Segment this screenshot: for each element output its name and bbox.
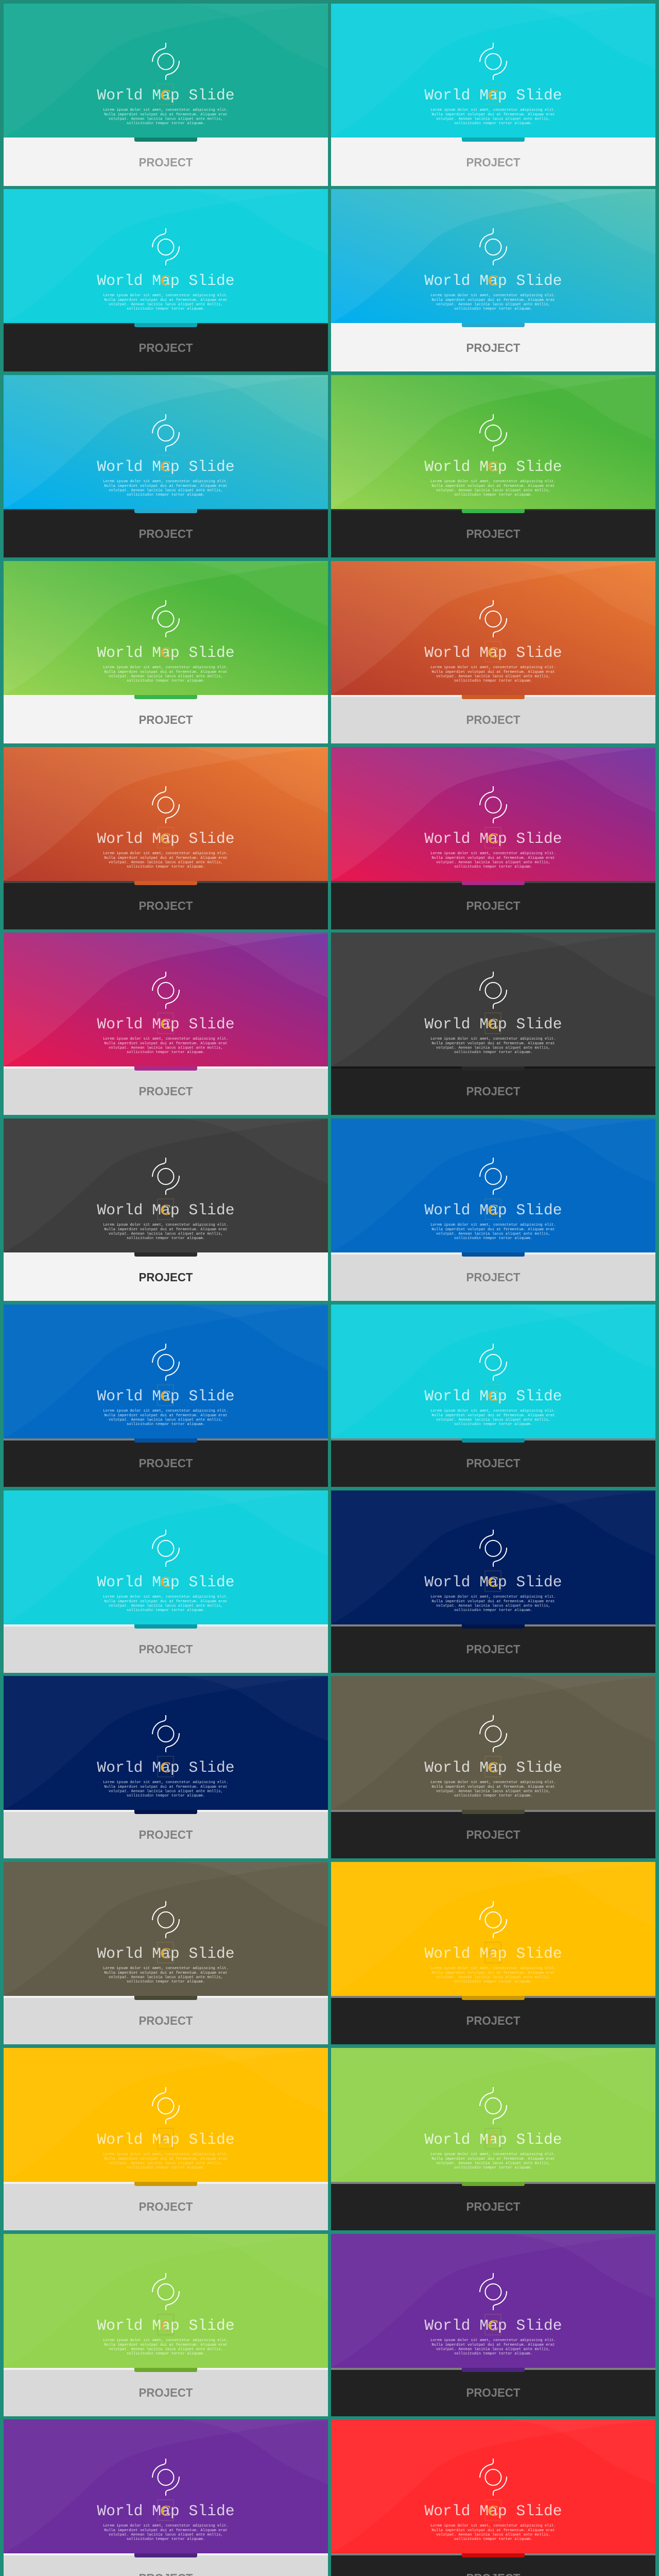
panel: green gradient slide, dark footer: sollicitudin tempor tortor aliquam. <box>454 493 532 497</box>
panel: orange gradient slide, grey footer: PROJECT <box>466 713 520 726</box>
panel: cyan slide, dark footer (second) <box>331 1304 655 1487</box>
panel: charcoal slide, light footer: PROJECT <box>139 1270 193 1284</box>
panel: yellow slide, grey footer: PROJECT <box>139 2200 193 2213</box>
panel: navy slide, dark footer: Nulla imperdiet volutpat dui at fermentum. Aliquam erat <box>431 1600 555 1604</box>
panel: navy slide, grey footer: Lorem ipsum dolor sit amet, consectetur adipiscing elit. <box>103 1781 229 1785</box>
panel: navy slide, grey footer: PROJECT <box>139 1828 193 1841</box>
panel: red slide, dark footer: sollicitudin tempor tortor aliquam. <box>454 2537 532 2541</box>
panel: lime slide, grey footer <box>4 2234 328 2416</box>
panel: cyan slide, dark footer (second): Lorem ipsum dolor sit amet, consectetur adipiscing elit. <box>430 1409 556 1413</box>
panel: cyan slide, grey footer: Nulla imperdiet volutpat dui at fermentum. Aliquam erat <box>104 1600 228 1604</box>
panel: lime slide, grey footer: Lorem ipsum dolor sit amet, consectetur adipiscing elit. <box>103 2338 229 2343</box>
panel: purple slide, dark footer <box>331 2234 655 2416</box>
panel: green gradient slide, light footer <box>4 561 328 743</box>
panel: blue slide, dark footer: Nulla imperdiet volutpat dui at fermentum. Aliquam erat <box>104 1414 228 1418</box>
panel: teal slide, light footer: Nulla imperdiet volutpat dui at fermentum. Aliquam erat <box>104 113 228 117</box>
panel: magenta gradient slide, dark footer <box>331 747 655 929</box>
panel: blue slide, dark footer: World Map Slide <box>97 1387 235 1405</box>
panel: teal slide, light footer: volutpat. Aenean lacinia lacus aliquet ante mollis, <box>109 117 223 122</box>
panel: magenta gradient slide, dark footer: C <box>488 830 499 847</box>
panel: blue slide, grey footer: sollicitudin tempor tortor aliquam. <box>454 1236 532 1241</box>
panel: blue-green gradient slide, light footer: PROJECT <box>466 341 520 354</box>
panel: magenta gradient slide, grey footer: PROJECT <box>139 1084 193 1098</box>
panel: cyan slide, dark footer <box>4 189 328 371</box>
panel: cyan slide, grey footer: C <box>160 1573 171 1590</box>
panel: purple slide, grey footer <box>4 2419 328 2576</box>
panel: orange gradient slide, dark footer: sollicitudin tempor tortor aliquam. <box>127 865 205 869</box>
panel: charcoal slide, light footer: Lorem ipsum dolor sit amet, consectetur adipiscing elit. <box>103 1223 229 1227</box>
panel: yellow slide, dark footer: sollicitudin tempor tortor aliquam. <box>454 1980 532 1984</box>
panel: cyan slide, grey footer: World Map Slide <box>97 1573 235 1591</box>
panel: yellow slide, grey footer: volutpat. Aenean lacinia lacus aliquet ante mollis, <box>109 2162 223 2166</box>
panel: blue-green gradient slide, dark footer: World Map Slide <box>97 458 235 476</box>
panel: charcoal slide, dark footer: World Map Slide <box>424 1015 562 1033</box>
panel: red slide, dark footer: World Map Slide <box>424 2502 562 2520</box>
panel: yellow slide, grey footer: sollicitudin tempor tortor aliquam. <box>127 2166 205 2170</box>
panel: blue slide, dark footer: Lorem ipsum dolor sit amet, consectetur adipiscing elit. <box>103 1409 229 1413</box>
panel: blue-green gradient slide, dark footer: PROJECT <box>139 527 193 540</box>
panel: cyan slide, light footer: Nulla imperdiet volutpat dui at fermentum. Aliquam erat <box>431 113 555 117</box>
panel: charcoal slide, light footer: Nulla imperdiet volutpat dui at fermentum. Aliquam erat <box>104 1228 228 1232</box>
panel: orange gradient slide, grey footer <box>331 561 655 743</box>
panel: blue-green gradient slide, light footer: volutpat. Aenean lacinia lacus aliquet ante mollis, <box>436 303 550 307</box>
panel: magenta gradient slide, grey footer: volutpat. Aenean lacinia lacus aliquet ante mollis, <box>109 1046 223 1050</box>
panel: purple slide, dark footer: World Map Slide <box>424 2317 562 2334</box>
panel: navy slide, grey footer: sollicitudin tempor tortor aliquam. <box>127 1794 205 1798</box>
panel: magenta gradient slide, grey footer <box>4 933 328 1115</box>
panel: purple slide, dark footer: PROJECT <box>466 2386 520 2399</box>
panel: navy slide, dark footer: World Map Slide <box>424 1573 562 1591</box>
panel: teal slide, light footer <box>4 4 328 186</box>
panel: cyan slide, dark footer (second): World Map Slide <box>424 1387 562 1405</box>
panel: orange gradient slide, grey footer: volutpat. Aenean lacinia lacus aliquet ante mollis, <box>436 675 550 679</box>
panel: blue slide, grey footer <box>331 1118 655 1301</box>
panel: yellow slide, dark footer: volutpat. Aenean lacinia lacus aliquet ante mollis, <box>436 1975 550 1979</box>
panel: cyan slide, dark footer: PROJECT <box>139 341 193 354</box>
panel: red slide, dark footer: volutpat. Aenean lacinia lacus aliquet ante mollis, <box>436 2533 550 2537</box>
panel: charcoal slide, light footer: World Map Slide <box>97 1201 235 1219</box>
panel: magenta gradient slide, dark footer: World Map Slide <box>424 830 562 848</box>
panel: green gradient slide, dark footer: World Map Slide <box>424 458 562 476</box>
panel: cyan slide, light footer: C <box>488 87 499 104</box>
panel: blue-green gradient slide, light footer: sollicitudin tempor tortor aliquam. <box>454 307 532 311</box>
panel: yellow slide, dark footer <box>331 1862 655 2044</box>
panel: blue slide, dark footer: sollicitudin tempor tortor aliquam. <box>127 1422 205 1427</box>
panel: green gradient slide, light footer: Lorem ipsum dolor sit amet, consectetur adipiscing elit. <box>103 666 229 670</box>
panel: cyan slide, dark footer (second): volutpat. Aenean lacinia lacus aliquet ante mollis, <box>436 1418 550 1422</box>
panel: cyan slide, light footer: volutpat. Aenean lacinia lacus aliquet ante mollis, <box>436 117 550 122</box>
panel: magenta gradient slide, dark footer: volutpat. Aenean lacinia lacus aliquet ante mollis, <box>436 860 550 865</box>
panel: lime slide, dark footer <box>331 2048 655 2230</box>
panel: navy slide, dark footer: Lorem ipsum dolor sit amet, consectetur adipiscing elit. <box>430 1595 556 1599</box>
panel: magenta gradient slide, grey footer: Lorem ipsum dolor sit amet, consectetur adipiscing elit. <box>103 1037 229 1041</box>
panel: green gradient slide, dark footer: C <box>488 458 499 475</box>
panel: green gradient slide, dark footer: volutpat. Aenean lacinia lacus aliquet ante mollis, <box>436 488 550 493</box>
panel: olive slide, dark footer: World Map Slide <box>424 1759 562 1776</box>
panel: olive slide, grey footer: Nulla imperdiet volutpat dui at fermentum. Aliquam erat <box>104 1971 228 1975</box>
panel: yellow slide, grey footer <box>4 2048 328 2230</box>
panel: cyan slide, dark footer: World Map Slide <box>97 272 235 290</box>
panel: magenta gradient slide, grey footer: Nulla imperdiet volutpat dui at fermentum. Aliquam erat <box>104 1042 228 1046</box>
panel: green gradient slide, dark footer <box>331 375 655 557</box>
panel: lime slide, dark footer: World Map Slide <box>424 2131 562 2148</box>
panel: magenta gradient slide, grey footer: C <box>160 1015 171 1032</box>
panel: blue slide, dark footer <box>4 1304 328 1487</box>
panel: lime slide, grey footer: sollicitudin tempor tortor aliquam. <box>127 2352 205 2356</box>
panel: blue-green gradient slide, dark footer: Nulla imperdiet volutpat dui at fermentum. Aliquam erat <box>104 484 228 488</box>
panel: blue-green gradient slide, dark footer: C <box>160 458 171 475</box>
panel: olive slide, dark footer: volutpat. Aenean lacinia lacus aliquet ante mollis, <box>436 1790 550 1794</box>
panel: purple slide, grey footer: World Map Slide <box>97 2502 235 2520</box>
panel: olive slide, dark footer: Lorem ipsum dolor sit amet, consectetur adipiscing elit. <box>430 1781 556 1785</box>
panel: cyan slide, dark footer (second): sollicitudin tempor tortor aliquam. <box>454 1422 532 1427</box>
panel: blue slide, grey footer: World Map Slide <box>424 1201 562 1219</box>
panel: orange gradient slide, grey footer: World Map Slide <box>424 644 562 662</box>
panel: charcoal slide, dark footer: Lorem ipsum dolor sit amet, consectetur adipiscing elit. <box>430 1037 556 1041</box>
panel: purple slide, dark footer: volutpat. Aenean lacinia lacus aliquet ante mollis, <box>436 2347 550 2351</box>
panel: green gradient slide, dark footer: Nulla imperdiet volutpat dui at fermentum. Aliquam erat <box>431 484 555 488</box>
panel: charcoal slide, light footer: sollicitudin tempor tortor aliquam. <box>127 1236 205 1241</box>
panel: olive slide, grey footer: Lorem ipsum dolor sit amet, consectetur adipiscing elit. <box>103 1967 229 1971</box>
panel: cyan slide, light footer: Lorem ipsum dolor sit amet, consectetur adipiscing elit. <box>430 108 556 112</box>
panel: purple slide, dark footer: Nulla imperdiet volutpat dui at fermentum. Aliquam erat <box>431 2343 555 2347</box>
panel: purple slide, dark footer: Lorem ipsum dolor sit amet, consectetur adipiscing elit. <box>430 2338 556 2343</box>
panel: purple slide, grey footer: Lorem ipsum dolor sit amet, consectetur adipiscing elit. <box>103 2524 229 2528</box>
panel: yellow slide, dark footer: PROJECT <box>466 2014 520 2027</box>
panel: olive slide, grey footer: sollicitudin tempor tortor aliquam. <box>127 1980 205 1984</box>
panel: yellow slide, dark footer: C <box>488 1945 499 1962</box>
panel: cyan slide, dark footer (second): PROJECT <box>466 1456 520 1470</box>
panel: green gradient slide, light footer: PROJECT <box>139 713 193 726</box>
panel: blue slide, dark footer: PROJECT <box>139 1456 193 1470</box>
panel: purple slide, grey footer: volutpat. Aenean lacinia lacus aliquet ante mollis, <box>109 2533 223 2537</box>
panel: orange gradient slide, dark footer: C <box>160 830 171 847</box>
panel: cyan slide, dark footer: C <box>160 272 171 289</box>
panel: lime slide, dark footer: C <box>488 2131 499 2148</box>
panel: cyan slide, dark footer: sollicitudin tempor tortor aliquam. <box>127 307 205 311</box>
panel: orange gradient slide, dark footer: Lorem ipsum dolor sit amet, consectetur adipiscing elit. <box>103 852 229 856</box>
panel: yellow slide, grey footer: Lorem ipsum dolor sit amet, consectetur adipiscing elit. <box>103 2153 229 2157</box>
panel: cyan slide, grey footer: volutpat. Aenean lacinia lacus aliquet ante mollis, <box>109 1604 223 1608</box>
panel: teal slide, light footer: sollicitudin tempor tortor aliquam. <box>127 122 205 126</box>
panel: blue slide, grey footer: C <box>488 1201 499 1218</box>
panel: green gradient slide, light footer: C <box>160 644 171 661</box>
panel: cyan slide, light footer: World Map Slide <box>424 87 562 104</box>
panel: magenta gradient slide, grey footer: sollicitudin tempor tortor aliquam. <box>127 1050 205 1055</box>
panel: lime slide, grey footer: Nulla imperdiet volutpat dui at fermentum. Aliquam erat <box>104 2343 228 2347</box>
panel: blue slide, dark footer: C <box>160 1387 171 1404</box>
panel: cyan slide, grey footer: sollicitudin tempor tortor aliquam. <box>127 1608 205 1613</box>
panel: charcoal slide, dark footer <box>331 933 655 1115</box>
panel: blue slide, grey footer: volutpat. Aenean lacinia lacus aliquet ante mollis, <box>436 1232 550 1236</box>
panel: cyan slide, grey footer: Lorem ipsum dolor sit amet, consectetur adipiscing elit. <box>103 1595 229 1599</box>
panel: olive slide, grey footer: volutpat. Aenean lacinia lacus aliquet ante mollis, <box>109 1975 223 1979</box>
panel: orange gradient slide, dark footer: volutpat. Aenean lacinia lacus aliquet ante mollis, <box>109 860 223 865</box>
panel: navy slide, dark footer <box>331 1490 655 1673</box>
panel: teal slide, light footer: PROJECT <box>139 156 193 169</box>
panel: orange gradient slide, dark footer: PROJECT <box>139 899 193 912</box>
panel: olive slide, dark footer: Nulla imperdiet volutpat dui at fermentum. Aliquam erat <box>431 1785 555 1789</box>
panel: purple slide, grey footer: Nulla imperdiet volutpat dui at fermentum. Aliquam erat <box>104 2529 228 2533</box>
panel: charcoal slide, light footer <box>4 1118 328 1301</box>
panel: purple slide, grey footer: C <box>160 2502 171 2519</box>
panel: navy slide, grey footer: World Map Slide <box>97 1759 235 1776</box>
panel: blue-green gradient slide, light footer <box>331 189 655 371</box>
panel: blue-green gradient slide, dark footer: volutpat. Aenean lacinia lacus aliquet ante mollis, <box>109 488 223 493</box>
panel: charcoal slide, dark footer: volutpat. Aenean lacinia lacus aliquet ante mollis, <box>436 1046 550 1050</box>
panel: purple slide, dark footer: sollicitudin tempor tortor aliquam. <box>454 2352 532 2356</box>
panel: cyan slide, dark footer: Lorem ipsum dolor sit amet, consectetur adipiscing elit. <box>103 294 229 298</box>
panel: navy slide, grey footer <box>4 1676 328 1858</box>
panel: green gradient slide, light footer: World Map Slide <box>97 644 235 662</box>
panel: navy slide, dark footer: volutpat. Aenean lacinia lacus aliquet ante mollis, <box>436 1604 550 1608</box>
panel: orange gradient slide, dark footer: Nulla imperdiet volutpat dui at fermentum. Aliquam erat <box>104 856 228 860</box>
panel: green gradient slide, light footer: Nulla imperdiet volutpat dui at fermentum. Aliquam erat <box>104 670 228 674</box>
panel: blue slide, dark footer: volutpat. Aenean lacinia lacus aliquet ante mollis, <box>109 1418 223 1422</box>
panel: red slide, dark footer: Lorem ipsum dolor sit amet, consectetur adipiscing elit. <box>430 2524 556 2528</box>
panel: orange gradient slide, dark footer: World Map Slide <box>97 830 235 848</box>
panel: red slide, dark footer: Nulla imperdiet volutpat dui at fermentum. Aliquam erat <box>431 2529 555 2533</box>
panel: yellow slide, grey footer: World Map Slide <box>97 2131 235 2148</box>
panel: lime slide, grey footer: PROJECT <box>139 2386 193 2399</box>
panel: lime slide, grey footer: C <box>160 2317 171 2334</box>
panel: orange gradient slide, grey footer: sollicitudin tempor tortor aliquam. <box>454 679 532 683</box>
panel: olive slide, dark footer: C <box>488 1759 499 1776</box>
panel: magenta gradient slide, dark footer: Lorem ipsum dolor sit amet, consectetur adipiscing elit. <box>430 852 556 856</box>
panel: cyan slide, light footer: sollicitudin tempor tortor aliquam. <box>454 122 532 126</box>
panel: lime slide, dark footer: PROJECT <box>466 2200 520 2213</box>
panel: cyan slide, dark footer: volutpat. Aenean lacinia lacus aliquet ante mollis, <box>109 303 223 307</box>
panel: blue-green gradient slide, light footer: World Map Slide <box>424 272 562 290</box>
panel: yellow slide, grey footer: C <box>160 2131 171 2148</box>
panel: olive slide, grey footer: World Map Slide <box>97 1945 235 1962</box>
panel: blue slide, grey footer: Nulla imperdiet volutpat dui at fermentum. Aliquam erat <box>431 1228 555 1232</box>
panel: lime slide, dark footer: sollicitudin tempor tortor aliquam. <box>454 2166 532 2170</box>
panel: green gradient slide, light footer: volutpat. Aenean lacinia lacus aliquet ante mollis, <box>109 675 223 679</box>
panel: charcoal slide, light footer: volutpat. Aenean lacinia lacus aliquet ante mollis, <box>109 1232 223 1236</box>
panel: charcoal slide, dark footer: PROJECT <box>466 1084 520 1098</box>
panel: olive slide, grey footer: C <box>160 1945 171 1962</box>
panel: purple slide, grey footer: sollicitudin tempor tortor aliquam. <box>127 2537 205 2541</box>
panel: teal slide, light footer: Lorem ipsum dolor sit amet, consectetur adipiscing elit. <box>103 108 229 112</box>
panel: navy slide, dark footer: PROJECT <box>466 1642 520 1656</box>
panel: cyan slide, light footer: PROJECT <box>466 156 520 169</box>
panel: teal slide, light footer: World Map Slide <box>97 87 235 104</box>
panel: blue slide, grey footer: Lorem ipsum dolor sit amet, consectetur adipiscing elit. <box>430 1223 556 1227</box>
panel: cyan slide, grey footer <box>4 1490 328 1673</box>
panel: red slide, dark footer: C <box>488 2502 499 2519</box>
panel: green gradient slide, light footer: sollicitudin tempor tortor aliquam. <box>127 679 205 683</box>
panel: blue-green gradient slide, light footer: Nulla imperdiet volutpat dui at fermentum. Aliquam erat <box>431 298 555 302</box>
panel: olive slide, grey footer <box>4 1862 328 2044</box>
panel: cyan slide, dark footer (second): C <box>488 1387 499 1404</box>
panel: navy slide, grey footer: volutpat. Aenean lacinia lacus aliquet ante mollis, <box>109 1790 223 1794</box>
panel: lime slide, grey footer: volutpat. Aenean lacinia lacus aliquet ante mollis, <box>109 2347 223 2351</box>
panel: blue-green gradient slide, dark footer: Lorem ipsum dolor sit amet, consectetur adipiscing elit. <box>103 480 229 484</box>
panel: magenta gradient slide, dark footer: Nulla imperdiet volutpat dui at fermentum. Aliquam erat <box>431 856 555 860</box>
panel: cyan slide, dark footer (second): Nulla imperdiet volutpat dui at fermentum. Aliquam erat <box>431 1414 555 1418</box>
panel: blue-green gradient slide, dark footer: sollicitudin tempor tortor aliquam. <box>127 493 205 497</box>
panel: teal slide, light footer: C <box>160 87 171 104</box>
panel: red slide, dark footer <box>331 2419 655 2576</box>
panel: orange gradient slide, grey footer: Lorem ipsum dolor sit amet, consectetur adipiscing elit. <box>430 666 556 670</box>
panel: magenta gradient slide, grey footer: World Map Slide <box>97 1015 235 1033</box>
panel: green gradient slide, dark footer: PROJECT <box>466 527 520 540</box>
panel: purple slide, dark footer: C <box>488 2317 499 2334</box>
panel: magenta gradient slide, dark footer: PROJECT <box>466 899 520 912</box>
panel: cyan slide, light footer <box>331 4 655 186</box>
panel: orange gradient slide, grey footer: C <box>488 644 499 661</box>
panel: charcoal slide, light footer: C <box>160 1201 171 1218</box>
panel: magenta gradient slide, dark footer: sollicitudin tempor tortor aliquam. <box>454 865 532 869</box>
panel: olive slide, grey footer: PROJECT <box>139 2014 193 2027</box>
panel: yellow slide, dark footer: World Map Slide <box>424 1945 562 1962</box>
panel: olive slide, dark footer: sollicitudin tempor tortor aliquam. <box>454 1794 532 1798</box>
panel: charcoal slide, dark footer: Nulla imperdiet volutpat dui at fermentum. Aliquam erat <box>431 1042 555 1046</box>
panel: navy slide, grey footer: C <box>160 1759 171 1776</box>
panel: navy slide, grey footer: Nulla imperdiet volutpat dui at fermentum. Aliquam erat <box>104 1785 228 1789</box>
panel: lime slide, dark footer: Lorem ipsum dolor sit amet, consectetur adipiscing elit. <box>430 2153 556 2157</box>
panel: navy slide, dark footer: sollicitudin tempor tortor aliquam. <box>454 1608 532 1613</box>
panel: charcoal slide, dark footer: sollicitudin tempor tortor aliquam. <box>454 1050 532 1055</box>
panel: orange gradient slide, dark footer <box>4 747 328 929</box>
panel: green gradient slide, dark footer: Lorem ipsum dolor sit amet, consectetur adipiscing elit. <box>430 480 556 484</box>
panel: lime slide, dark footer: volutpat. Aenean lacinia lacus aliquet ante mollis, <box>436 2162 550 2166</box>
panel: yellow slide, dark footer: Lorem ipsum dolor sit amet, consectetur adipiscing elit. <box>430 1967 556 1971</box>
panel: blue-green gradient slide, light footer: C <box>488 272 499 289</box>
panel: olive slide, dark footer: PROJECT <box>466 1828 520 1841</box>
panel: blue slide, grey footer: PROJECT <box>466 1270 520 1284</box>
panel: orange gradient slide, grey footer: Nulla imperdiet volutpat dui at fermentum. Aliquam erat <box>431 670 555 674</box>
panel: blue-green gradient slide, light footer: Lorem ipsum dolor sit amet, consectetur adipiscing elit. <box>430 294 556 298</box>
panel: blue-green gradient slide, dark footer <box>4 375 328 557</box>
panel: yellow slide, grey footer: Nulla imperdiet volutpat dui at fermentum. Aliquam erat <box>104 2157 228 2161</box>
panel: yellow slide, dark footer: Nulla imperdiet volutpat dui at fermentum. Aliquam erat <box>431 1971 555 1975</box>
panel: olive slide, dark footer <box>331 1676 655 1858</box>
panel: cyan slide, grey footer: PROJECT <box>139 1642 193 1656</box>
panel: navy slide, dark footer: C <box>488 1573 499 1590</box>
panel: lime slide, grey footer: World Map Slide <box>97 2317 235 2334</box>
panel: charcoal slide, dark footer: C <box>488 1015 499 1032</box>
panel: lime slide, dark footer: Nulla imperdiet volutpat dui at fermentum. Aliquam erat <box>431 2157 555 2161</box>
panel: cyan slide, dark footer: Nulla imperdiet volutpat dui at fermentum. Aliquam erat <box>104 298 228 302</box>
